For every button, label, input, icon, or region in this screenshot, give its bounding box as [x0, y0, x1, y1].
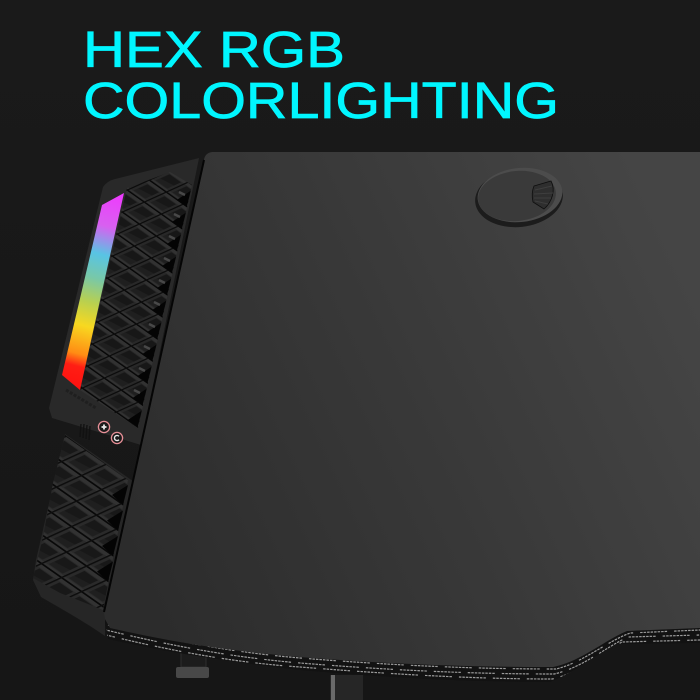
mode button	[111, 432, 123, 444]
title	[83, 21, 559, 129]
RGB light strip	[62, 193, 124, 390]
lower edge shadow triangles	[97, 485, 128, 582]
plus button	[98, 421, 110, 433]
cable grommet	[472, 164, 566, 231]
upper edge shadow triangles	[128, 191, 191, 427]
title line 1: HEX RGB	[83, 21, 345, 78]
title line 2: COLORLIGHTING	[83, 72, 559, 129]
upper side panel with mesh	[49, 158, 199, 445]
grommet notch	[532, 181, 553, 209]
upper mesh highlights	[134, 192, 185, 393]
carbon fibre edge band	[106, 625, 700, 680]
desk top surface	[104, 152, 700, 667]
panel logo	[66, 390, 96, 408]
desk leg and cable	[330, 675, 363, 700]
desk left edge shadow	[104, 160, 204, 612]
adjustment knob	[176, 652, 209, 678]
control panel vents	[80, 424, 90, 440]
lower side panel with mesh	[33, 434, 140, 636]
